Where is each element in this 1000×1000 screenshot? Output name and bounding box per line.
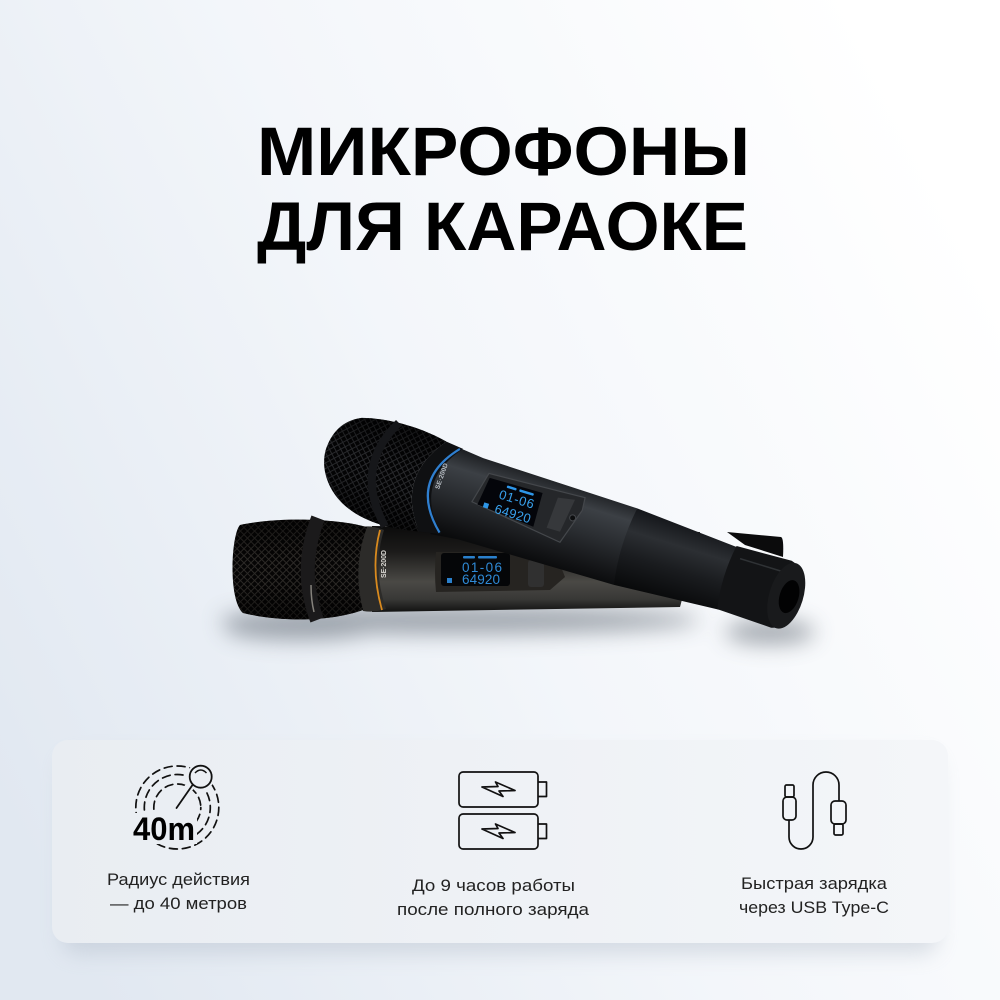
panel shadow	[62, 756, 938, 954]
upper mic button	[547, 494, 575, 533]
caption: battery: после полного заряда	[397, 900, 590, 919]
lower mic grille band	[308, 518, 318, 620]
lower mic display	[441, 553, 510, 587]
upper mic blue ring	[417, 443, 465, 533]
panel background	[52, 740, 948, 943]
upper mic display: 64920	[493, 501, 533, 526]
lower mic display: 64920	[462, 572, 500, 587]
upper mic jack hole	[775, 578, 803, 616]
feature: range	[107, 766, 250, 913]
upper mic grille band	[357, 419, 415, 526]
caption: range	[107, 870, 250, 913]
upper mic model label: SE·200D	[434, 462, 450, 490]
upper mic collar	[401, 436, 467, 538]
title: ДЛЯ КАРАОКЕ	[257, 188, 748, 265]
lower mic orange ring	[375, 530, 382, 610]
caption: range: Радиус действия	[107, 870, 250, 889]
icon: USB cable	[783, 772, 846, 849]
upper mic control panel	[468, 466, 586, 546]
microphone: rear clip	[727, 532, 783, 557]
caption: battery	[397, 876, 590, 919]
upper mic display: 01-06	[497, 487, 536, 512]
caption: charging: Быстрая зарядка	[741, 874, 888, 893]
icon: two batteries	[459, 772, 546, 849]
caption: charging: через USB Type-C	[739, 898, 889, 917]
features panel	[52, 740, 948, 954]
lower mic model label: SE·200D	[381, 550, 388, 578]
upper mic display	[476, 476, 544, 528]
lower mic grille	[232, 520, 367, 619]
microphone: upper with blue ring	[309, 404, 818, 649]
microphone: lower with orange ring	[232, 518, 700, 620]
upper mic screw	[569, 514, 576, 522]
upper mic rear sleeve	[611, 507, 741, 616]
lower mic button	[528, 560, 544, 587]
feature: battery	[397, 772, 590, 919]
product photo: two wireless microphones	[220, 404, 818, 649]
caption: range: — до 40 метров	[110, 894, 247, 913]
lower mic collar	[357, 526, 386, 612]
icon: 40 m range: 40m	[133, 811, 195, 847]
feature: charging	[739, 772, 889, 917]
lower mic control panel	[435, 552, 565, 592]
shadow under microphones	[220, 606, 815, 644]
icon: 40 m range	[133, 766, 219, 849]
title: МИКРОФОНЫ	[257, 113, 750, 190]
caption: battery: До 9 часов работы	[412, 876, 575, 895]
upper mic tail cap	[714, 543, 811, 634]
upper mic body	[415, 442, 639, 590]
lower mic body	[372, 526, 700, 612]
upper mic grille	[310, 404, 448, 536]
caption: charging	[739, 874, 889, 917]
upper mic end face	[760, 558, 812, 633]
title	[257, 113, 750, 265]
lower mic display: 01-06	[462, 560, 502, 575]
